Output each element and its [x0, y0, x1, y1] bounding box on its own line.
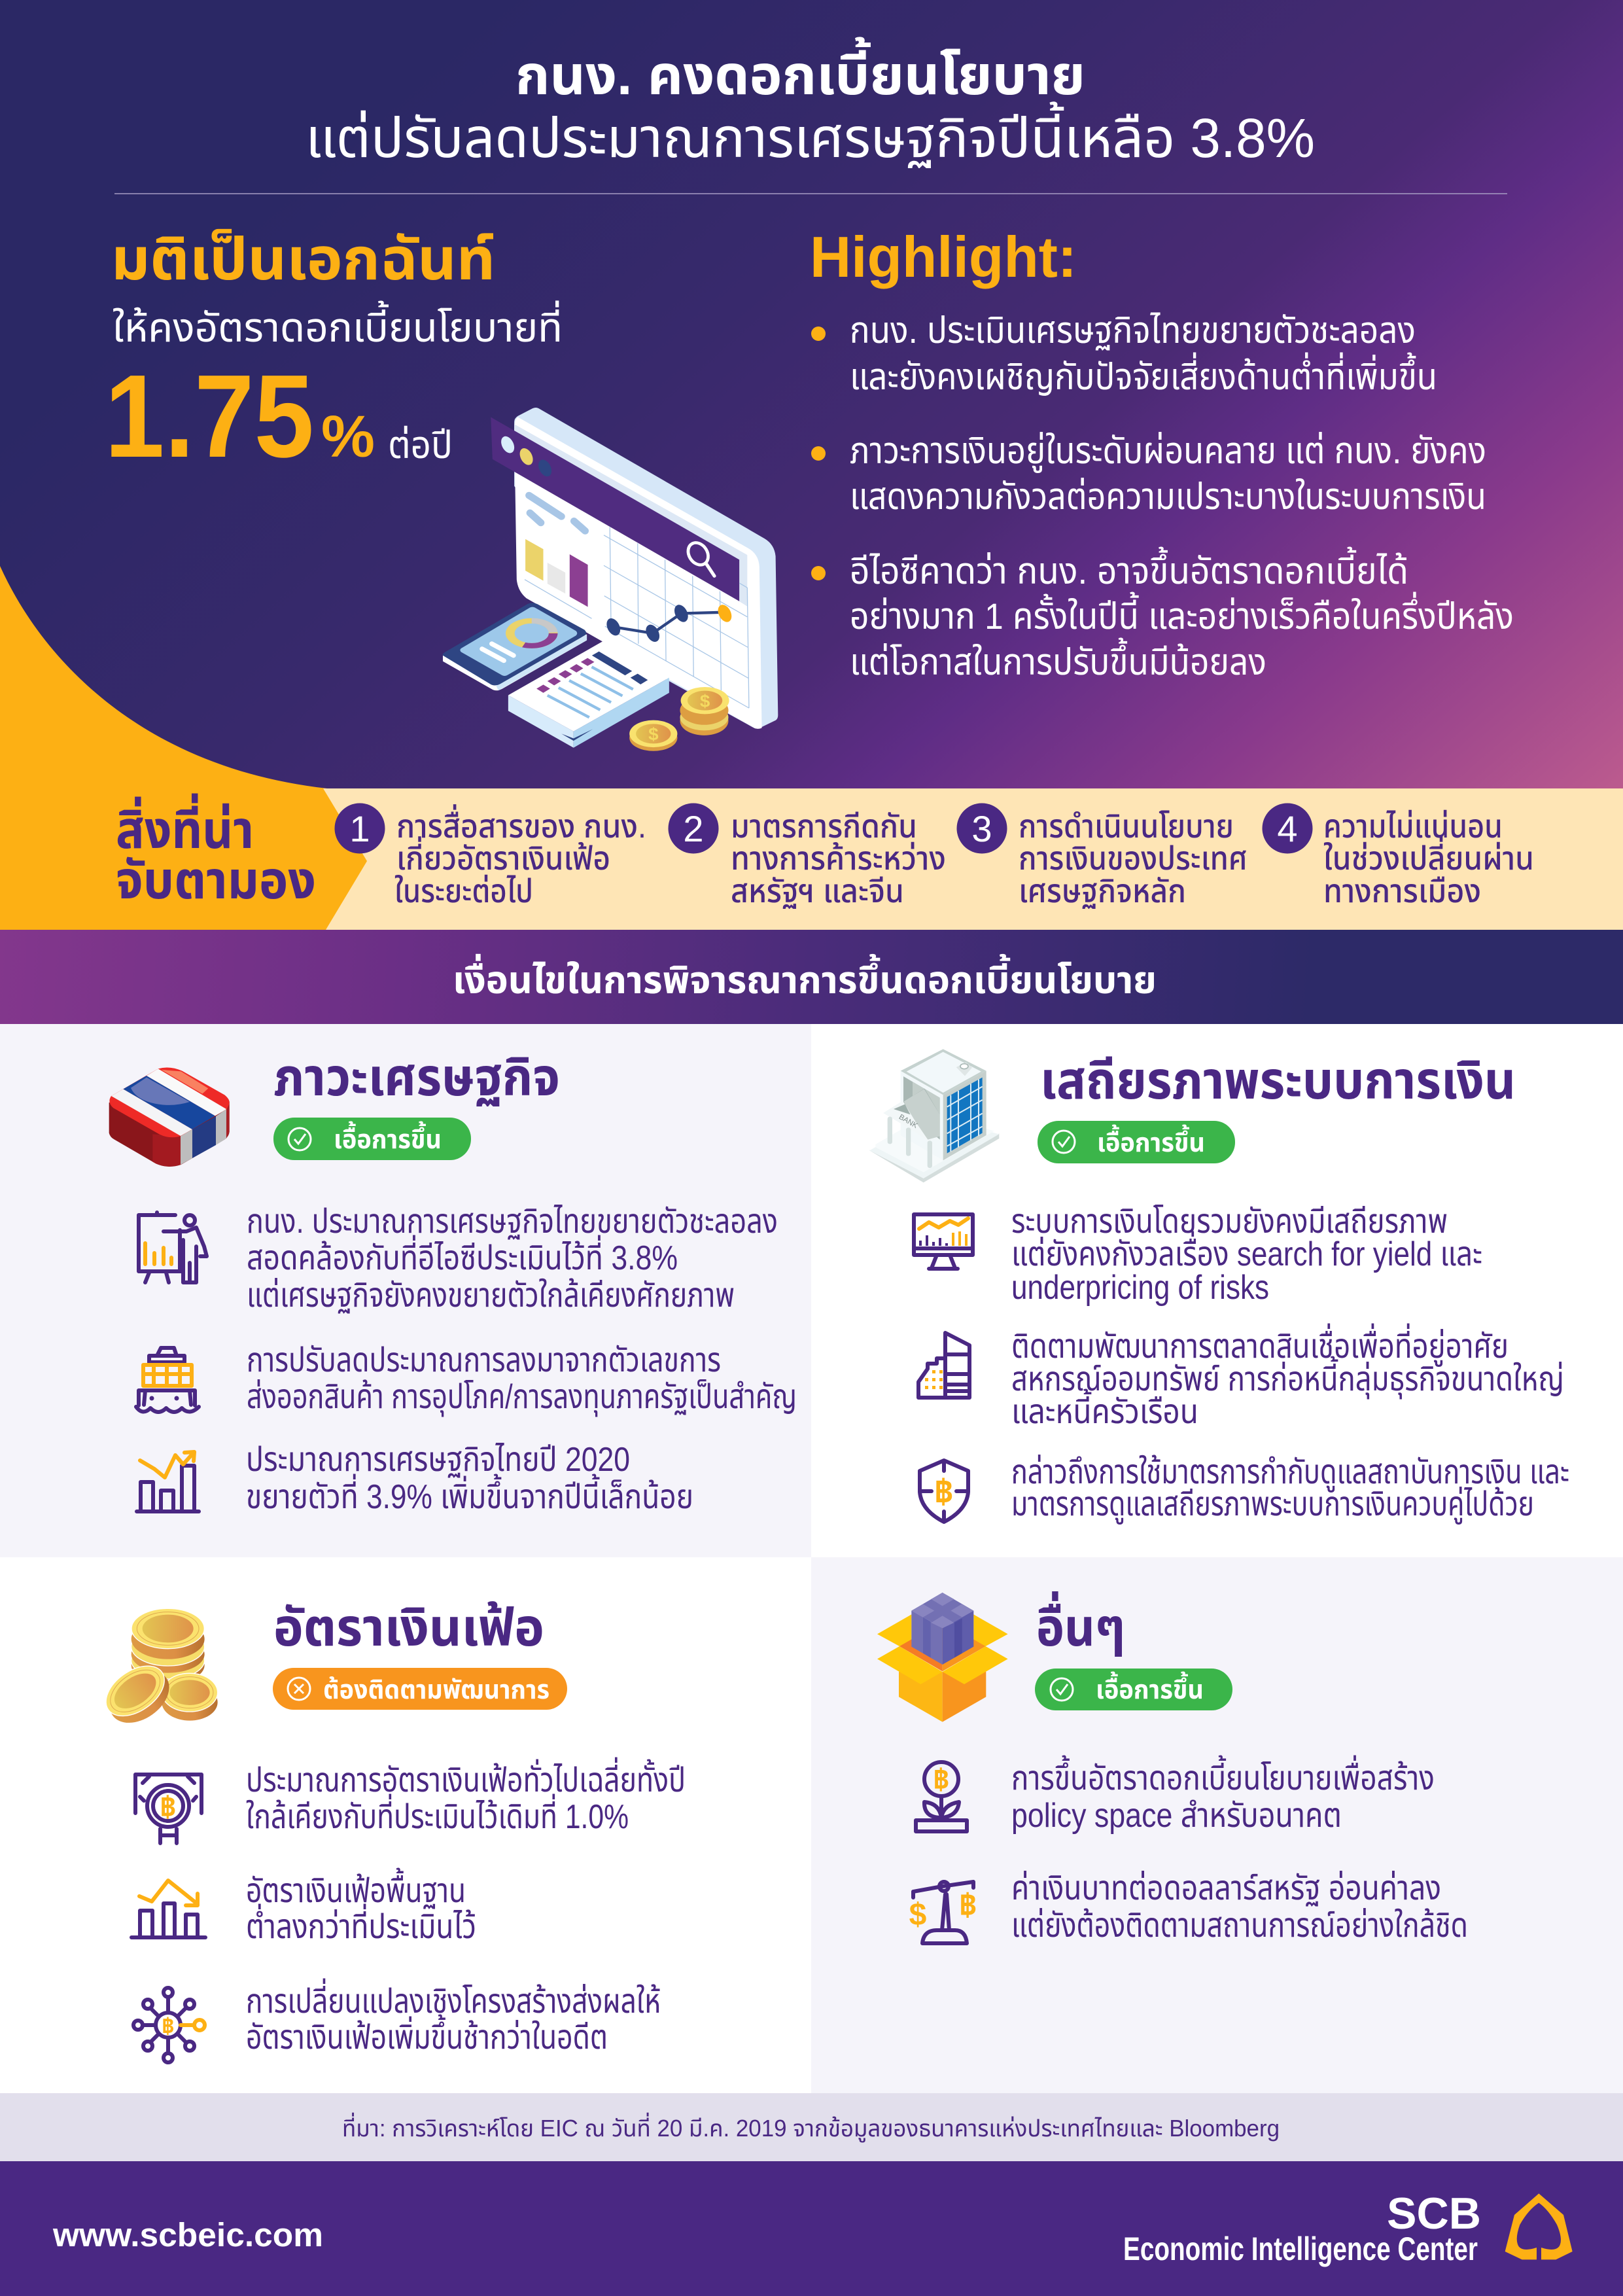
economy point 1: แต่เศรษฐกิจยังคงขยายตัวใกล้เคียงศักยภาพ: [247, 1277, 735, 1315]
panel: financial stability: [811, 1024, 1623, 1557]
watch item 1: ในระยะต่อไป: [394, 873, 533, 910]
icon: network: ฿: [162, 2014, 175, 2039]
website: www.scbeic.com: [52, 2216, 323, 2253]
bullet 3: อย่างมาก 1 ครั้งในปีนี้ และอย่างเร็วคือในครึ่งปีหลัง: [850, 592, 1514, 637]
icon: gold coins: [97, 1608, 218, 1733]
percent sign: %: [321, 404, 375, 470]
icon: money plant: ฿: [933, 1764, 950, 1796]
others point 2: [1011, 1869, 1468, 1945]
watch item 2: [669, 804, 946, 910]
orange corner shape: [0, 566, 327, 788]
icon: shield baht: ฿: [934, 1474, 954, 1511]
inflation point 1: ใกล้เคียงกับที่ประเมินไว้เดิมที่ 1.0%: [246, 1793, 629, 1836]
icon: city buildings: [918, 1333, 969, 1398]
policy rate sentence: ให้คงอัตราดอกเบี้ยนโยบายที่: [113, 300, 563, 351]
others point 1: [1011, 1755, 1435, 1835]
economy point 1: [247, 1203, 778, 1315]
bullet 1: กนง. ประเมินเศรษฐกิจไทยขยายตัวชะลอลง: [850, 309, 1416, 351]
watch item 2: สหรัฐฯ และจีน: [731, 873, 904, 910]
status pill: supportive: เอื้อการขึ้น: [334, 1121, 442, 1154]
bullet 2: แสดงความกังวลต่อความเปราะบางในระบบการเงิน: [850, 476, 1486, 517]
watch item 2: 2: [683, 808, 704, 849]
highlight heading: Highlight:: [810, 224, 1077, 289]
watch item 4: ความไม่แน่นอน: [1323, 808, 1503, 845]
stability point 1: underpricing of risks: [1011, 1269, 1269, 1307]
stability point 3: [1011, 1453, 1569, 1525]
icon: presenter: [139, 1212, 207, 1282]
economy heading: ภาวะเศรษฐกิจ: [273, 1048, 560, 1106]
watch item 2: มาตรการกีดกัน: [731, 808, 917, 845]
icon: exchange balance: [909, 1882, 977, 1943]
icon: magnifier banknote: ฿: [160, 1792, 177, 1824]
stability point 2: [1011, 1323, 1564, 1431]
others point 1: policy space สำหรับอนาคต: [1011, 1797, 1342, 1835]
icon: falling bars: [131, 1881, 205, 1937]
watch item 3: [956, 804, 1248, 910]
watch item 1: เกี่ยวอัตราเงินเฟ้อ: [396, 836, 610, 877]
status pill: supportive: [273, 1118, 471, 1160]
panel: policy decision: [105, 227, 563, 482]
panel: things to watch: จับตามอง: [116, 851, 316, 910]
icon: monitor chart: [914, 1214, 973, 1269]
per year: ต่อปี: [388, 424, 453, 467]
icon: cargo ship: [136, 1348, 199, 1412]
watch item 1: การสื่อสารของ กนง.: [396, 804, 646, 845]
section banner: [0, 930, 1623, 1024]
inflation point 3: [246, 1978, 661, 2057]
heading: unanimous: มติเป็นเอกฉันท์: [111, 227, 495, 292]
watch item 4: [1263, 804, 1534, 910]
watch item 3: การดำเนินนโยบาย: [1019, 808, 1234, 845]
economy point 2: [247, 1341, 797, 1417]
bullet 2: ภาวะการเงินอยู่ในระดับผ่อนคลาย แต่ กนง. ยังคง: [850, 430, 1486, 473]
others heading: อื่นๆ: [1036, 1591, 1125, 1657]
watch item 2: ทางการค้าระหว่าง: [731, 840, 946, 877]
icon: exchange balance: ฿: [959, 1888, 977, 1923]
bullet 1: และยังคงเผชิญกับปัจจัยเสี่ยงด้านต่ำที่เพิ่มขึ้น: [850, 352, 1437, 397]
illustration: dashboard: $: [700, 691, 710, 711]
economy point 1: กนง. ประมาณการเศรษฐกิจไทยขยายตัวชะลอลง: [247, 1203, 778, 1241]
illustration: dashboard: $: [648, 724, 659, 744]
illustration: dashboard: [443, 408, 778, 751]
source note: [0, 2093, 1623, 2161]
icon: exchange balance: $: [909, 1898, 927, 1932]
stability point 2: และหนี้ครัวเรือน: [1011, 1388, 1198, 1431]
icon: bank building: [869, 1049, 999, 1182]
SCB wordmark: SCB: [1387, 2189, 1481, 2238]
panel: things to watch: [0, 788, 1623, 930]
hero background: [0, 0, 1623, 788]
icon: network: [133, 1988, 205, 2062]
icon: bank building: BANK: [898, 1113, 919, 1130]
title: แต่ปรับลดประมาณการเศรษฐกิจปีนี้เหลือ 3.8%: [305, 101, 1315, 169]
bullet 2: [811, 430, 1486, 517]
watch item 4: ทางการเมือง: [1323, 873, 1481, 910]
inflation heading: อัตราเงินเฟ้อ: [273, 1598, 544, 1657]
inflation point 1: ประมาณการอัตราเงินเฟ้อทั่วไปเฉลี่ยทั้งปี: [246, 1757, 686, 1799]
panel: inflation: [0, 1557, 811, 2093]
source note: ที่มา: การวิเคราะห์โดย EIC ณ วันที่ 20 มี.ค. 2019 จากข้อมูลของธนาคารแห่งประเทศไทยและ Bloomberg: [342, 2112, 1280, 2142]
title: กนง. คงดอกเบี้ยนโยบาย: [515, 37, 1085, 106]
watch item 3: 3: [971, 808, 992, 849]
watch item 4: 4: [1277, 808, 1298, 849]
panel: highlight: [810, 224, 1514, 682]
watch item 3: เศรษฐกิจหลัก: [1019, 873, 1186, 910]
bullet 3: แต่โอกาสในการปรับขึ้นมีน้อยลง: [850, 637, 1266, 682]
watch item 1: [335, 804, 646, 910]
inflation point 3: การเปลี่ยนแปลงเชิงโครงสร้างส่งผลให้: [246, 1978, 661, 2021]
status pill: supportive: [1038, 1121, 1235, 1163]
status pill: supportive: เอื้อการขึ้น: [1096, 1671, 1204, 1704]
stability heading: เสถียรภาพระบบการเงิน: [1040, 1051, 1516, 1110]
economy point 2: ส่งออกสินค้า การอุปโภค/การลงทุนภาครัฐเป็นสำคัญ: [247, 1378, 797, 1417]
stability point 1: ระบบการเงินโดยรวมยังคงมีเสถียรภาพ: [1011, 1203, 1448, 1241]
icon: money plant: [916, 1762, 967, 1831]
policy rate value: 1.75: [105, 351, 314, 482]
economy point 2: การปรับลดประมาณการลงมาจากตัวเลขการ: [247, 1341, 721, 1379]
panel: economy: [0, 1024, 811, 1557]
status pill: supportive: เอื้อการขึ้น: [1097, 1124, 1205, 1157]
organisation name: Economic Intelligence Center: [1123, 2231, 1478, 2267]
stability point 1: แต่ยังคงกังวลเรื่อง search for yield และ: [1011, 1231, 1482, 1273]
watch item 4: ในช่วงเปลี่ยนผ่าน: [1323, 836, 1534, 877]
status pill: supportive: [1035, 1669, 1232, 1710]
inflation point 1: [246, 1757, 686, 1836]
things to watch heading: สิ่งที่น่า: [116, 794, 254, 859]
economy point 3: ขยายตัวที่ 3.9% เพิ่มขึ้นจากปีนี้เล็กน้อย: [246, 1474, 693, 1516]
footer: [0, 2161, 1623, 2296]
icon: SCB logo: [1505, 2193, 1573, 2259]
inflation point 2: อัตราเงินเฟ้อพื้นฐาน: [246, 1867, 466, 1910]
icon: rising bars: [137, 1452, 199, 1511]
icon: magnifier banknote: [135, 1775, 201, 1843]
inflation point 3: อัตราเงินเฟ้อเพิ่มขึ้นช้ากว่าในอดีต: [246, 2014, 608, 2057]
stability point 2: ติดตามพัฒนาการตลาดสินเชื่อเพื่อที่อยู่อาศัย: [1011, 1323, 1509, 1367]
section banner: เงื่อนไขในการพิจารณาการขึ้นดอกเบี้ยนโยบาย: [453, 953, 1157, 1002]
inflation point 2: [246, 1867, 476, 1946]
inflation point 2: ต่ำลงกว่าที่ประเมินไว้: [246, 1903, 476, 1946]
stability point 1: [1011, 1203, 1482, 1307]
others point 1: การขึ้นอัตราดอกเบี้ยนโยบายเพื่อสร้าง: [1011, 1755, 1435, 1797]
bullet 3: [811, 546, 1514, 682]
economy point 3: [246, 1441, 693, 1516]
economy point 1: สอดคล้องกับที่อีไอซีประเมินไว้ที่ 3.8%: [247, 1235, 678, 1277]
others point 2: แต่ยังต้องติดตามสถานการณ์อย่างใกล้ชิด: [1011, 1907, 1468, 1945]
status pill: monitor: [273, 1668, 567, 1710]
bullet 1: [811, 309, 1437, 397]
economy point 3: ประมาณการเศรษฐกิจไทยปี 2020: [246, 1441, 630, 1479]
icon: thai flag: [107, 1065, 234, 1167]
watch item 1: 1: [349, 808, 370, 849]
icon: open box: [877, 1593, 1008, 1722]
watch item 3: การเงินของประเทศ: [1019, 840, 1248, 877]
others point 2: ค่าเงินบาทต่อดอลลาร์สหรัฐ อ่อนค่าลง: [1011, 1869, 1441, 1907]
bullet 3: อีไอซีคาดว่า กนง. อาจขึ้นอัตราดอกเบี้ยได้: [850, 546, 1408, 592]
title: [305, 37, 1315, 169]
icon: shield baht: [920, 1460, 968, 1522]
status pill: monitor: ต้องติดตามพัฒนาการ: [323, 1675, 550, 1704]
panel: others: [811, 1557, 1623, 2093]
